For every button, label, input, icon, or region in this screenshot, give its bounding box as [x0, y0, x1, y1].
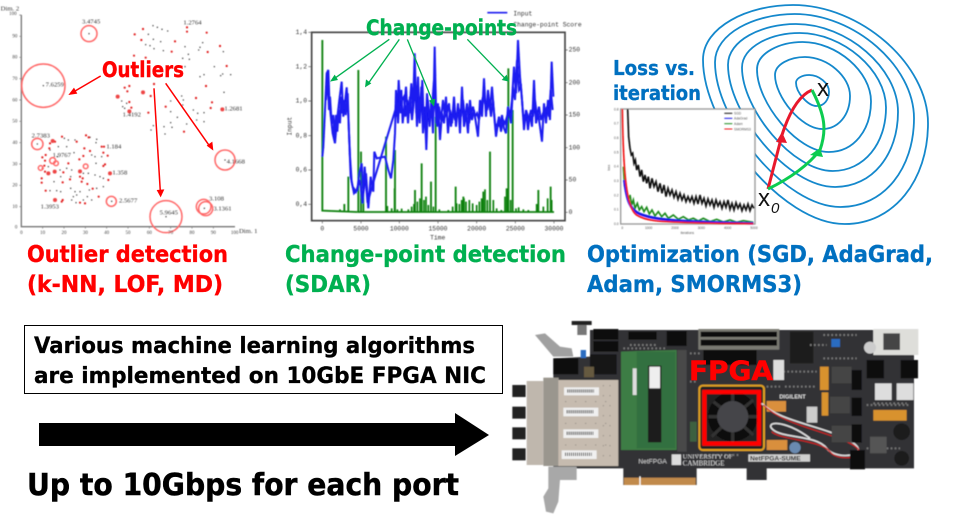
scatter plot: outliers: 0: [15, 226, 18, 231]
scatter plot: outliers: 50: [126, 231, 131, 236]
scatter plot: outliers: 30: [83, 231, 88, 236]
line chart: input and change-point score: 30000: [544, 226, 564, 233]
line chart: loss vs iteration: SGD: [734, 112, 742, 116]
path: green optimizer: [768, 90, 824, 189]
photo: NetFPGA-SUME board: UNIVERSITY OF: [683, 453, 733, 460]
line chart: loss vs iteration: 0.2: [614, 193, 619, 197]
scatter plot: outliers: 1.184: [106, 143, 122, 150]
scatter plot: outliers: 70: [168, 231, 174, 236]
scatter plot: outliers: 2.5677: [119, 197, 138, 204]
scatter plot: outliers: 30: [12, 162, 18, 167]
scatter plot: outliers: 20: [62, 231, 67, 236]
line chart: loss vs iteration: 0: [621, 226, 623, 230]
scatter plot: outliers: 10: [12, 205, 18, 210]
line chart: loss vs iteration: 0.4: [614, 165, 619, 169]
line chart: input and change-point score: 25000: [506, 226, 525, 233]
line chart: loss vs iteration: 0.5: [614, 150, 619, 154]
scatter plot: outliers: 0: [20, 231, 23, 236]
line chart: loss vs iteration: 0.1: [614, 208, 619, 212]
scatter plot: outliers: [1, 6, 257, 236]
line chart: input and change-point score: 100: [569, 144, 580, 151]
line chart: loss vs iteration: 5000: [750, 226, 758, 230]
label: loss vs iteration: Loss vs.: [613, 56, 695, 80]
line chart: input and change-point score: 1,4: [296, 29, 307, 36]
line chart: input and change-point score: 0: [569, 209, 573, 216]
line chart: loss vs iteration: loss: [607, 164, 611, 171]
scatter plot: outliers: 60: [12, 98, 18, 103]
line chart: input and change-point score: Input: [286, 116, 293, 136]
heading: change-point detection: Change-point detection: [285, 242, 566, 268]
scatter plot: outliers: 4.1668: [227, 159, 246, 166]
photo: NetFPGA-SUME board: DIGILENT: [779, 394, 806, 400]
line chart: input and change-point score: [286, 10, 582, 241]
line chart: loss vs iteration: SMORMS3: [734, 127, 751, 131]
scatter plot: outliers: 10: [40, 231, 46, 236]
line chart: input and change-point score: 1,2: [296, 63, 307, 70]
scatter plot: outliers: 90: [12, 35, 18, 40]
scatter plot: outliers: 20: [12, 184, 18, 189]
scatter plot: outliers: 50: [12, 120, 18, 125]
line chart: input and change-point score: 1,0: [296, 98, 307, 105]
heading: outlier detection: Outlier detection: [27, 242, 228, 268]
label: start x0: 0: [771, 200, 780, 217]
line chart: loss vs iteration: 2000: [671, 226, 679, 230]
line chart: loss vs iteration: 4000: [724, 226, 732, 230]
path: red optimizer: [768, 90, 812, 189]
line chart: loss vs iteration: 0.6: [614, 136, 619, 140]
contour diagram: [703, 5, 928, 224]
line chart: loss vs iteration: 1000: [645, 226, 653, 230]
line chart: loss vs iteration: 3000: [698, 226, 705, 230]
heading: change-point detection: (SDAR): [285, 272, 371, 298]
scatter plot: outliers: 80: [12, 56, 18, 61]
line chart: loss vs iteration: 0.3: [614, 179, 619, 183]
line chart: input and change-point score: 250: [569, 47, 580, 54]
arrows: outliers to circles: [68, 76, 213, 197]
line chart: input and change-point score: 10000: [390, 226, 409, 233]
label: start x0: [758, 185, 780, 217]
scatter plot: outliers: 100: [231, 231, 239, 236]
photo: NetFPGA-SUME board: CAMBRIDGE: [683, 459, 725, 467]
photo: NetFPGA-SUME board: NetFPGA: [638, 459, 667, 466]
label: optimum x: x: [817, 75, 829, 102]
heading: optimization: Adam, SMORMS3): [587, 272, 802, 298]
photo: NetFPGA-SUME board: NetFPGA-SUME: [750, 455, 801, 462]
scatter plot: outliers: 3.108: [209, 195, 225, 202]
line chart: loss vs iteration: [607, 107, 758, 235]
line chart: loss vs iteration: iterations: [681, 231, 694, 235]
panel: optimization: [587, 5, 933, 298]
panel: outlier detection: [1, 6, 257, 298]
scatter plot: outliers: 1.2681: [224, 106, 243, 113]
scatter plot: outliers: 70: [12, 77, 18, 82]
line chart: input and change-point score: Input: [513, 10, 533, 17]
scatter plot: outliers: 40: [12, 141, 18, 146]
heading: change-point detection: [285, 242, 566, 298]
line chart: input and change-point score: 50: [569, 177, 576, 184]
scatter plot: outliers: 1.9767: [53, 152, 72, 159]
scatter plot: outliers: 90: [211, 231, 216, 236]
line chart: input and change-point score: 0,6: [296, 167, 307, 174]
line chart: loss vs iteration: 0.0: [614, 222, 619, 226]
label: loss vs iteration: iteration: [613, 81, 701, 105]
scatter plot: outliers: 1.2764: [183, 20, 202, 27]
line chart: input and change-point score: 200: [569, 79, 580, 86]
line chart: input and change-point score: 0,8: [296, 132, 307, 139]
line chart: loss vs iteration: 0.7: [614, 122, 619, 126]
scatter plot: outliers: 100: [9, 12, 17, 17]
callout: implementation note: [24, 326, 502, 394]
heading: optimization: Optimization (SGD, AdaGrad,: [587, 242, 933, 268]
photo: NetFPGA-SUME board: [512, 321, 918, 513]
scatter plot: outliers: 1.3953: [41, 203, 60, 210]
line chart: input and change-point score: 5000: [353, 226, 369, 233]
label: loss vs iteration: [613, 56, 701, 105]
heading: optimization: [587, 242, 933, 298]
scatter plot: outliers: 80: [190, 231, 195, 236]
scatter plot: outliers: 2.7383: [32, 132, 51, 139]
line chart: input and change-point score: 0,4: [296, 201, 307, 208]
line chart: input and change-point score: Time: [430, 234, 445, 241]
line chart: loss vs iteration: Adam: [734, 122, 743, 126]
callout: implementation note: Various machine learning algorithms: [34, 334, 475, 359]
line chart: input and change-point score: 0: [320, 226, 324, 233]
arrows: to change-points: [330, 39, 509, 107]
scatter plot: outliers: 3.1361: [213, 205, 232, 212]
heading: outlier detection: [27, 242, 228, 298]
label: start x0: x: [758, 185, 770, 212]
scatter plot: outliers: 60: [147, 231, 152, 236]
line chart: input and change-point score: Change-point Score: [513, 21, 582, 28]
scatter plot: outliers: 3.4745: [82, 19, 101, 26]
arrow: throughput: [39, 413, 489, 456]
scatter plot: outliers: 5.9645: [160, 210, 179, 217]
scatter plot: outliers: 1.358: [112, 169, 128, 176]
heading: outlier detection: (k-NN, LOF, MD): [27, 272, 223, 298]
scatter plot: outliers: 7.6259: [46, 81, 65, 88]
panel: change-point detection: [285, 10, 582, 298]
scatter plot: outliers: 1.4192: [123, 112, 141, 119]
line chart: input and change-point score: 150: [569, 112, 580, 119]
callout: implementation note: are implemented on 10GbE FPGA NIC: [34, 364, 486, 389]
line chart: loss vs iteration: 0.8: [614, 107, 619, 111]
line chart: loss vs iteration: AdaGrad: [734, 117, 747, 121]
scatter plot: outliers: Dim. 1: [239, 228, 257, 235]
scatter plot: outliers: Dim. 2: [1, 6, 19, 13]
label: Outliers: Outliers: [102, 58, 184, 82]
label: FPGA: FPGA: [689, 356, 773, 387]
text: up to 10Gbps: Up to 10Gbps for each port: [27, 468, 459, 503]
line chart: input and change-point score: 20000: [467, 226, 486, 233]
label: Change-points: Change-points: [366, 16, 517, 40]
scatter plot: outliers: 40: [104, 231, 110, 236]
line chart: input and change-point score: 15000: [428, 226, 448, 233]
